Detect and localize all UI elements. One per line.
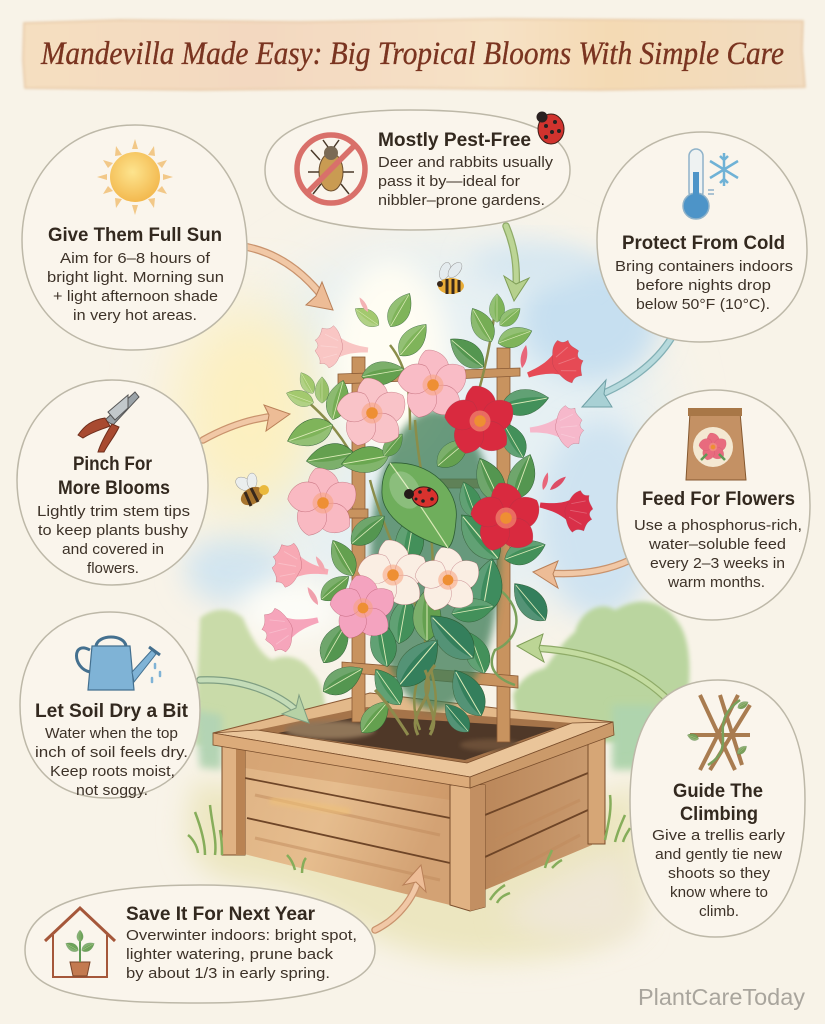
text: full sun: in very hot areas.	[73, 307, 197, 324]
text: save: by about 1/3 in early spring.	[126, 965, 330, 982]
text: full sun: bright light. Morning sun	[47, 269, 224, 286]
heading: save: Save It For Next Year	[126, 903, 315, 925]
text: protect from cold	[615, 258, 793, 313]
wooden planter back rim and soil	[213, 693, 613, 777]
grass tufts	[188, 795, 630, 903]
text: full sun	[47, 250, 224, 324]
text: pest-free	[378, 154, 554, 209]
trumpet mandevilla flowers	[257, 296, 596, 656]
background bushes	[195, 602, 689, 770]
panel: protect from cold	[597, 132, 807, 342]
text: guide climbing: and gently tie new	[655, 846, 782, 863]
front mandevilla flowers	[285, 350, 544, 643]
icon: ladybug	[536, 112, 564, 144]
icon: no beetle	[297, 135, 365, 203]
icon: trellis	[686, 695, 750, 770]
text: pest-free: nibbler–prone gardens.	[378, 192, 545, 209]
panel: save for next year	[25, 885, 375, 1003]
arrow: cold	[582, 337, 672, 407]
text: pinch	[37, 503, 190, 577]
vine stems	[300, 310, 516, 730]
heading: guide climbing: Climbing	[680, 803, 758, 825]
text: pest-free: Deer and rabbits usually	[378, 154, 554, 171]
text: guide climbing: Give a trellis early	[652, 827, 786, 844]
heading: pinch	[58, 453, 170, 499]
text: soil: Water when the top	[45, 725, 178, 742]
text: feed: water–soluble feed	[648, 536, 786, 553]
heading: soil: Let Soil Dry a Bit	[35, 700, 188, 722]
text: soil: not soggy.	[76, 782, 148, 799]
text: protect from cold: below 50°F (10°C).	[636, 296, 770, 313]
arrow: soil	[200, 680, 309, 723]
heading: pinch: More Blooms	[58, 477, 170, 499]
watercolor scene background	[175, 240, 660, 638]
dense foliage shadow behind plant	[370, 410, 500, 710]
twisted stems at base	[375, 665, 435, 735]
icon: house with plant	[45, 908, 115, 977]
arrow: sun	[247, 247, 333, 310]
heading: pest-free: Mostly Pest-Free	[378, 129, 531, 151]
text: pinch: and covered in	[62, 541, 164, 558]
text: save	[126, 927, 357, 982]
text: feed: warm months.	[667, 574, 765, 591]
panel: guide climbing	[630, 680, 805, 937]
text: guide climbing: climb.	[699, 903, 739, 920]
heading: guide climbing: Guide The	[673, 780, 763, 802]
text: guide climbing	[652, 827, 786, 920]
text: protect from cold: Bring containers indoors	[615, 258, 793, 275]
text: soil: inch of soil feels dry.	[35, 744, 188, 761]
arrow: save	[375, 865, 426, 930]
title banner	[23, 19, 805, 90]
text: feed: every 2–3 weeks in	[650, 555, 785, 572]
heading: full sun: Give Them Full Sun	[48, 224, 222, 246]
text: feed: Use a phosphorus-rich,	[634, 517, 802, 534]
trellis	[338, 348, 520, 742]
text: save: Overwinter indoors: bright spot,	[126, 927, 357, 944]
text: pinch: flowers.	[87, 560, 139, 577]
arrow: pinch	[203, 405, 290, 440]
heading: feed: Feed For Flowers	[642, 488, 795, 510]
watermark: PlantCareToday	[638, 984, 806, 1010]
heading: pinch: Pinch For	[73, 453, 152, 475]
text: feed	[634, 517, 802, 591]
text: pinch: to keep plants bushy	[38, 522, 189, 539]
foliage	[283, 288, 555, 740]
arrow: feed	[533, 560, 630, 588]
text: full sun: + light afternoon shade	[53, 288, 218, 305]
panel: soil	[20, 612, 200, 799]
panel: full sun	[22, 125, 247, 350]
text: soil: Keep roots moist,	[50, 763, 175, 780]
heading: protect from cold: Protect From Cold	[622, 232, 785, 254]
ground	[188, 780, 640, 960]
text: full sun: Aim for 6–8 hours of	[60, 250, 211, 267]
icon: watering can	[76, 637, 160, 690]
bee near left	[233, 473, 269, 509]
text: soil	[35, 725, 188, 799]
icon: pruners	[78, 392, 139, 452]
text: save: lighter watering, prune back	[126, 946, 334, 963]
panel: pest-free	[265, 110, 570, 230]
planter box	[213, 722, 614, 911]
text: pest-free: pass it by—ideal for	[378, 173, 520, 190]
icon: sun	[97, 139, 173, 215]
text: protect from cold: before nights drop	[636, 277, 771, 294]
arrow: guide	[517, 634, 665, 697]
icon: seed bag	[686, 408, 746, 480]
bee near top	[437, 260, 465, 294]
text: pinch: Lightly trim stem tips	[37, 503, 190, 520]
big leaf with ladybug	[382, 463, 456, 548]
panel: feed	[617, 390, 810, 620]
text: guide climbing: shoots so they	[668, 865, 771, 882]
text: guide climbing: know where to	[670, 884, 768, 901]
icon: thermometer and snowflake	[683, 149, 738, 219]
arrow: pest-free	[504, 226, 529, 301]
heading: guide climbing	[673, 780, 763, 825]
panel: pinch	[17, 380, 208, 585]
